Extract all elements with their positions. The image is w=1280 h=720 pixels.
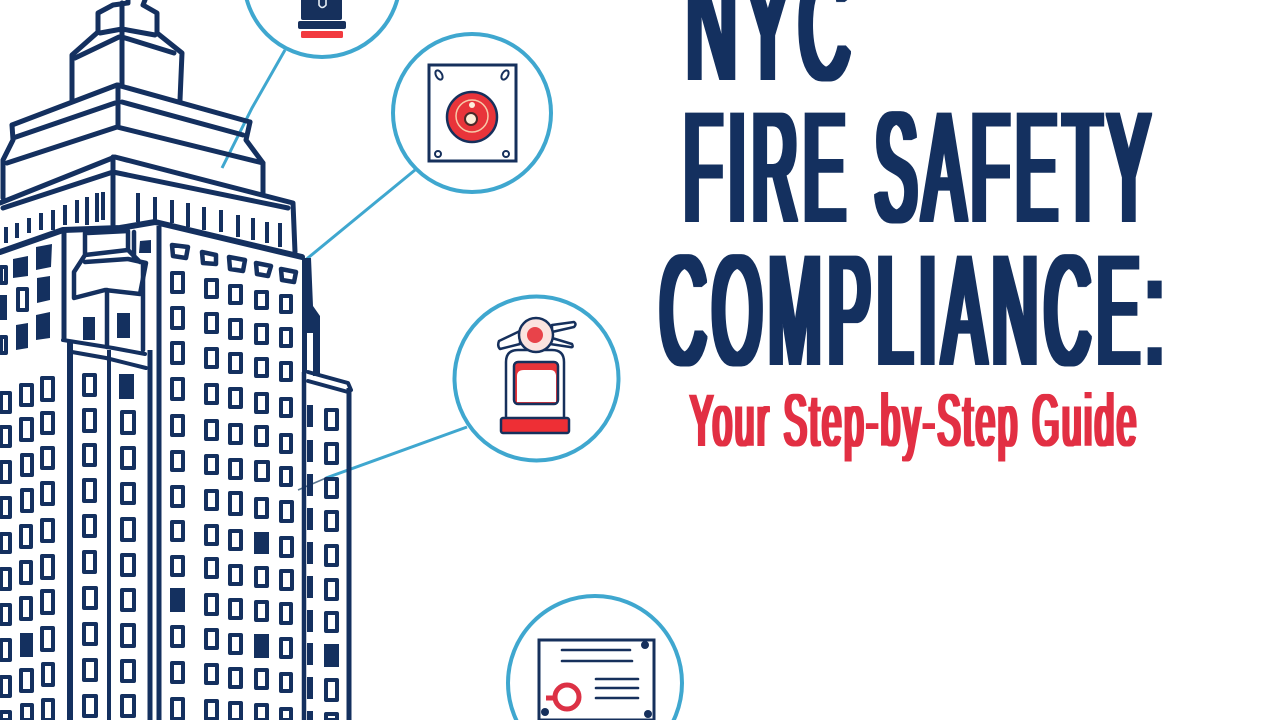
callout circle 1: sprinkler [244, 0, 400, 57]
callout circle 4: compliance certificate [508, 596, 682, 720]
icon: certificate [539, 640, 654, 720]
vertical edges [64, 226, 349, 720]
callout circle 2: fire alarm pull station [393, 34, 551, 192]
main cornice [0, 222, 302, 257]
windows: side wing [326, 410, 337, 720]
windows: centre face [84, 375, 134, 716]
icon: fire extinguisher [498, 318, 576, 433]
partial side-wing windows [307, 405, 313, 720]
cornice dentils [6, 192, 280, 247]
title [660, 0, 1170, 398]
windows: left face [1, 267, 53, 720]
building top: crown and tiers [0, 0, 295, 252]
windows: filled and heavy [0, 244, 339, 667]
windows: right face [172, 273, 292, 720]
central pilaster block [63, 231, 151, 368]
icon: alarm panel [429, 65, 516, 161]
building illustration [0, 0, 351, 720]
callout circle 3: fire extinguisher [454, 296, 618, 460]
connector lines [222, 50, 467, 490]
right shoulder and side wing [302, 258, 320, 376]
icon: sprinkler [298, 0, 346, 38]
windows: right face top row [172, 245, 296, 282]
